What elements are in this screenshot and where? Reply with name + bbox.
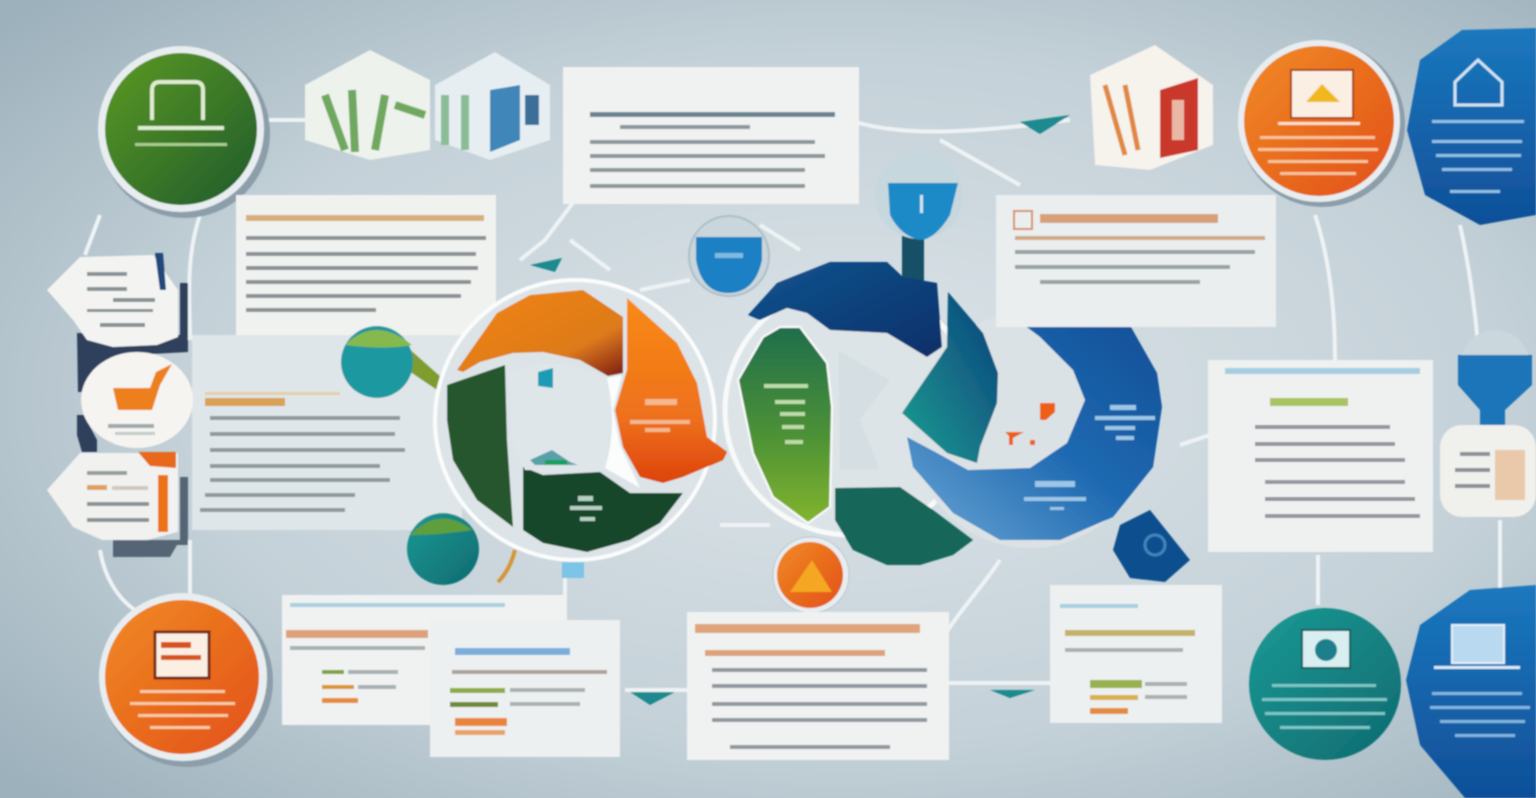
icon: top-right isometric cube [1090,45,1213,170]
panel: orange circle top right [1238,40,1405,207]
panel: text box bottom right [1050,585,1222,723]
icon: dark blue shield [1113,510,1190,582]
panel: teal circle bottom right [1249,608,1401,760]
icon: teal-green globe with pointer [341,326,450,398]
icon: blue pin with stem [875,151,963,285]
panel: blue hexagon top right [1407,28,1536,225]
icon: centre flag [538,368,553,388]
panel: left hexagon stack [47,253,193,557]
chart: left donut ring [435,280,727,560]
icon: camera glyph [1302,630,1350,668]
ring centre [510,365,612,470]
panel: text box bottom left double [282,595,620,757]
icon: house glyph [1455,60,1502,105]
connector lines [85,120,1500,690]
icon: green-teal circle lower [407,513,515,585]
label card 2 [81,352,193,448]
icon: green monitor [152,82,203,120]
panel: text box top centre [563,67,859,204]
chart: right swirl assembly [725,262,1162,565]
icon: orange circle badge [773,537,849,613]
segment: green leaf [738,327,832,523]
icon: blue funnel right edge [1458,330,1532,438]
icon: top-left isometric cube pair [305,50,550,160]
icon: orange document [155,632,209,678]
panel: text box upper right [996,195,1276,327]
segment: orange right [615,298,727,483]
panel: text box upper left [236,195,496,336]
dark backing [77,283,188,452]
panel: orange circle bottom left [99,593,273,767]
icon: small orange sprouts [1005,403,1055,445]
panel: text box bottom centre [687,612,949,760]
icon: teal connector accents [530,115,1070,705]
segment: orange top swoosh [457,290,623,376]
segment: dark teal lower [835,487,973,565]
segment: dark green left [447,365,513,527]
panel: text box right [1208,360,1433,552]
label card 1 [47,255,178,347]
segment: blue crescent [907,320,1162,540]
segment: dark blue top arc [748,262,942,357]
panel: text box middle left [192,335,462,530]
icon: orange presentation board [1291,70,1353,118]
icon: laptop glyph [1452,625,1504,663]
panel: green circle top left [98,46,270,218]
panel: blue hexagon bottom right [1406,585,1536,798]
segment: dark green bottom [523,467,683,552]
segment: teal blue blade [902,292,998,463]
centre highlight [838,350,890,470]
panel: right edge label card [1440,425,1536,517]
label card 3 [47,453,178,540]
icon: small blue badge [689,216,769,296]
